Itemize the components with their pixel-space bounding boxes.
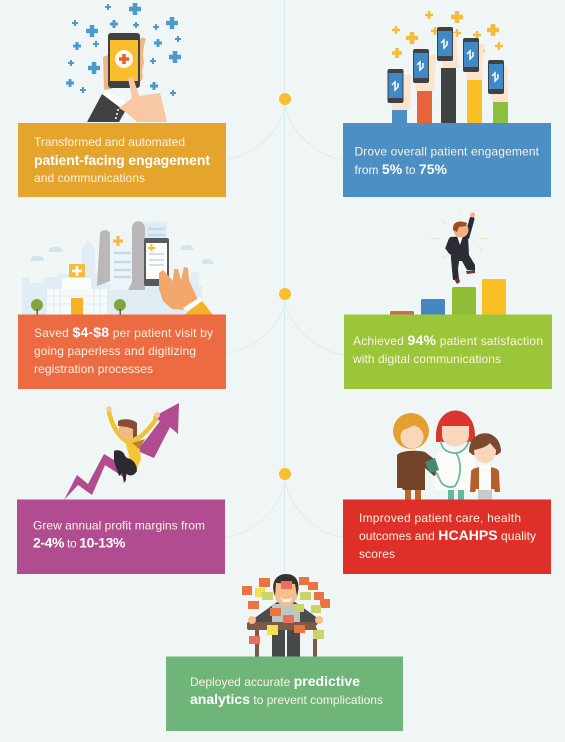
panel: profit margins — [17, 500, 225, 574]
icon: person riding growth arrow — [64, 403, 179, 500]
icon: city, hospital and digital form — [22, 221, 213, 315]
panel: predictive analytics: Deployed accurate predictive — [190, 673, 360, 689]
icon: raised phones on bars — [388, 11, 508, 123]
panel: patient engagement — [343, 123, 551, 197]
panel: profit margins: Grew annual profit margins from — [33, 518, 205, 532]
panel: patient satisfaction: Achieved 94% patient satisfaction — [353, 332, 543, 348]
panel: savings per patient visit: registration processes — [34, 362, 153, 376]
icon: businessman jumping on bars — [390, 211, 506, 316]
central timeline — [225, 0, 344, 600]
panel: patient care: outcomes and HCAHPS quality — [359, 527, 536, 543]
icon: man at desk with sticky notes — [242, 574, 330, 657]
panel: patient satisfaction: with digital communications — [352, 352, 501, 366]
panel: patient-facing engagement: Transformed and automated — [34, 135, 185, 149]
panel: savings per patient visit: going paperless and digitizing — [34, 344, 196, 358]
panel: patient engagement: Drove overall patient engagement — [354, 144, 540, 158]
panel: predictive analytics: analytics to prevent complications — [190, 691, 383, 707]
panel: patient care: Improved patient care, health — [359, 511, 521, 525]
icon: phone with medical crosses — [66, 3, 181, 122]
panel: patient-facing engagement: patient-facing engagement — [34, 152, 210, 168]
panel: patient engagement: from 5% to 75% — [354, 161, 448, 177]
panel: savings per patient visit — [18, 314, 226, 389]
panel: patient satisfaction — [344, 314, 552, 389]
panel: patient care: scores — [359, 547, 395, 561]
icon: patient, doctor and child — [393, 410, 501, 500]
panel: patient care — [343, 500, 551, 574]
panel: profit margins: 2-4% to 10-13% — [33, 534, 126, 550]
panel: patient-facing engagement: and communications — [34, 171, 145, 185]
panel: savings per patient visit: Saved $4-$8 per patient visit by — [34, 324, 213, 340]
panel: predictive analytics — [166, 656, 403, 731]
panel: patient-facing engagement — [18, 123, 226, 197]
